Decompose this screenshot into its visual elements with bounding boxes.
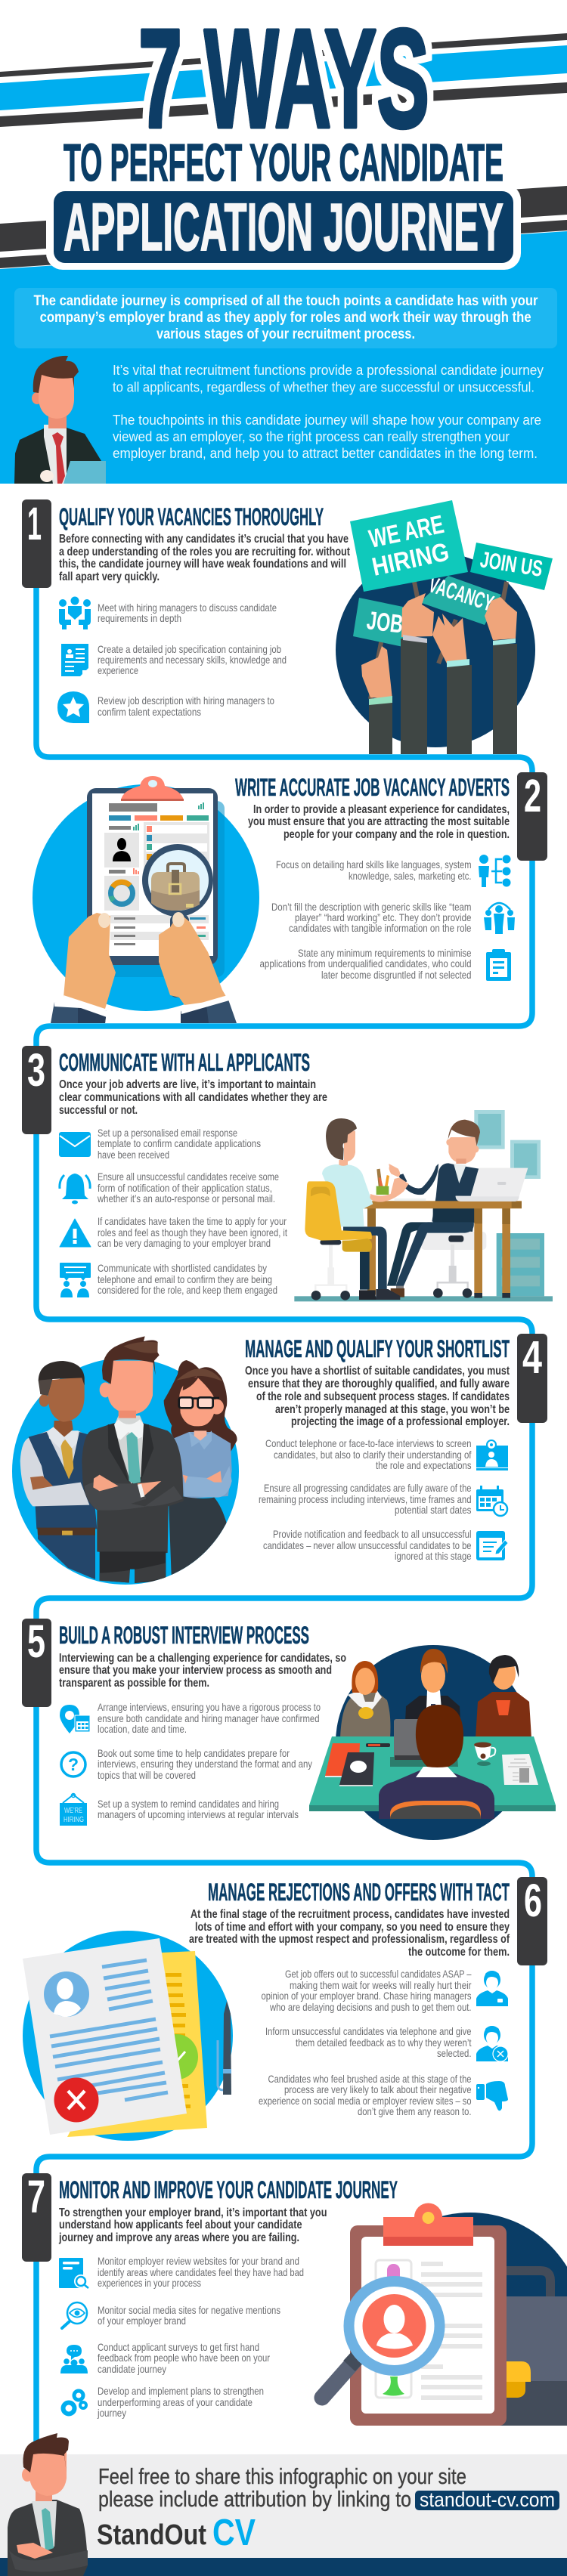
bullet: minimum requirements — [260, 947, 511, 981]
bullet: meet hiring managers: requirements in depth — [98, 612, 181, 624]
bullet: remaining process calendar: remaining process including interviews, time frames and — [259, 1493, 472, 1505]
bullet: shortlisted candidates chat: Communicate with shortlisted candidates by — [98, 1262, 267, 1274]
bullet: monitor social media: Monitor social media sites for negative mentions — [98, 2304, 280, 2316]
intro text 1: a deep understanding of the roles you are recruiting for. without — [59, 546, 351, 558]
bullet: help candidates prepare: topics that will be covered — [98, 1769, 196, 1781]
heading 1: QUALIFY YOUR VACANCIES THOROUGHLY — [59, 503, 324, 530]
bullet: improvement plans gears: underperforming areas of your candidate — [98, 2396, 253, 2408]
intro text 1: Before connecting with any candidates it’s crucial that you have — [59, 533, 349, 546]
bullet: inform unsuccessful candidates: them detailed feedback as to why they weren’t — [296, 2036, 472, 2049]
bullet: remaining process calendar — [259, 1482, 507, 1516]
bullet: generic skills — [271, 901, 515, 934]
illustration: interview panel at table — [309, 1645, 556, 1840]
bullet: improvement plans gears: Develop and implement plans to strengthen — [98, 2385, 264, 2397]
number badge 5 — [22, 1616, 51, 1707]
journey connector line — [36, 588, 532, 2457]
section 7 — [22, 2171, 567, 2439]
illustration: hiring signs held by hands: HIRING — [370, 537, 451, 582]
bullet: arrange interviews: ensure both candidate and hiring manager have confirmed — [98, 1712, 319, 1724]
intro text 7: journey and improve any areas where you are failing. — [58, 2231, 299, 2244]
intro text 2: people for your company and the role in question. — [284, 828, 510, 841]
intro text 2 — [248, 803, 510, 841]
bullet: meet hiring managers — [59, 597, 277, 629]
number badge 2 — [517, 770, 547, 861]
footer share text: Feel free to share this infographic on your site — [98, 2465, 466, 2489]
intro text 1 — [59, 533, 351, 583]
number badge 6: 6 — [524, 1875, 542, 1926]
intro text 4: ensure that they are thoroughly qualified, and fully aware — [248, 1378, 510, 1390]
header paragraphs: It’s vital that recruitment functions provide a professional candidate journey — [113, 362, 544, 378]
bullet: notification and feedback: candidates – never allow unsuccessful candidates to be — [263, 1539, 472, 1551]
illustration: office meeting at desk — [294, 1110, 553, 1301]
bullet: remaining process calendar: potential start dates — [395, 1504, 472, 1516]
bullet: applicant surveys: Conduct applicant surveys to get first hand — [98, 2341, 259, 2353]
header paragraphs: employer brand, and help you to attract better candidates in the long term. — [113, 445, 538, 461]
bullet: remaining process calendar: Ensure all progressing candidates are fully aware of the — [264, 1482, 472, 1494]
bullet: warning triangle: can be very damaging to your employer brand — [98, 1237, 271, 1249]
bullet: minimum requirements: later become disgruntled if not selected — [321, 969, 472, 981]
header paragraphs — [113, 362, 544, 461]
intro text 3: Once your job adverts are live, it’s important to maintain — [59, 1078, 316, 1091]
intro text 3 — [59, 1078, 327, 1117]
intro text 6 — [189, 1908, 510, 1959]
bullet: remind candidates sign — [60, 1794, 299, 1826]
bullet: improvement plans gears: journey — [97, 2407, 126, 2419]
number badge 7: 7 — [27, 2171, 45, 2222]
bullet: applicant surveys: feedback from people who have been on your — [98, 2352, 270, 2364]
intro text 1: this, the candidate journey will have weak foundations and will — [59, 558, 346, 571]
bullet: inform unsuccessful candidates — [265, 2025, 508, 2061]
bullet: job offers: making them wait for weeks will really hurt their — [290, 1979, 472, 1991]
illustration: hiring signs held by hands: WE ARE — [367, 510, 446, 554]
bullet: monitor social media — [62, 2302, 280, 2328]
bullet: telephone or face-to-face interviews: Conduct telephone or face-to-face interviews to screen — [265, 1437, 472, 1449]
bullet: hard skills — [276, 855, 511, 887]
bullet: remind candidates sign: HIRING — [64, 1816, 84, 1824]
bullet: notification and feedback: Provide notification and feedback to all unsuccessful — [273, 1528, 472, 1540]
number badge 3 — [22, 1044, 51, 1134]
bullet: email response: Set up a personalised email response — [98, 1127, 237, 1139]
number badge 2: 2 — [524, 770, 541, 821]
intro callout panel: various stages of your recruitment process. — [156, 326, 415, 342]
footer share text — [98, 2465, 466, 2512]
bullet: hard skills: knowledge, sales, marketing etc. — [349, 870, 472, 882]
bullet: job specification: experience — [98, 664, 138, 676]
bullet: arrange interviews: location, date and time. — [98, 1723, 187, 1735]
intro text 5: transparent as possible for them. — [59, 1677, 209, 1690]
bullet: notification bell: Ensure all unsuccessful candidates receive some — [98, 1170, 279, 1183]
bullet: job specification: Create a detailed job specification containing job — [98, 643, 281, 655]
footer link badge: standout-cv.com — [420, 2488, 555, 2511]
bullet: thumbs down: process are very likely to talk about their negative — [284, 2083, 472, 2095]
bullet: hard skills: Focus on detailing hard skills like languages, system — [276, 858, 472, 871]
intro text 5 — [59, 1652, 346, 1690]
illustration: CV documents with approve and reject marks — [23, 1931, 233, 2141]
bullet: help candidates prepare: ? — [68, 1755, 79, 1774]
section 3 — [22, 1044, 553, 1301]
intro text 6: the outcome for them. — [408, 1946, 510, 1959]
section 2 — [33, 770, 547, 1023]
bullet: review job description: Review job description with hiring managers to — [98, 694, 274, 707]
section 6 — [23, 1875, 547, 2141]
bullet: review job description: confirm talent expectations — [98, 706, 201, 718]
intro text 1: fall apart very quickly. — [59, 571, 160, 583]
bullet: notification bell — [60, 1170, 279, 1205]
bullet: telephone or face-to-face interviews: candidates, but also to clarify their understanding of — [274, 1449, 472, 1461]
bullet: arrange interviews: Arrange interviews, ensuring you have a rigorous process to — [98, 1701, 321, 1713]
bullet: meet hiring managers: Meet with hiring managers to discuss candidate — [98, 601, 277, 614]
number badge 4: 4 — [522, 1331, 542, 1383]
bullet: monitor review websites: experiences in your process — [98, 2277, 201, 2289]
bullet: monitor review websites — [59, 2255, 304, 2289]
number badge 6 — [517, 1875, 547, 1965]
bullet: applicant surveys — [60, 2341, 270, 2375]
bullet: remind candidates sign: Set up a system to remind candidates and hiring — [98, 1798, 279, 1810]
number badge 3: 3 — [27, 1044, 45, 1096]
intro text 4 — [245, 1365, 510, 1428]
intro text 7: To strengthen your employer brand, it’s important that you — [59, 2206, 327, 2219]
bullet: notification and feedback: ignored at this stage — [395, 1550, 472, 1562]
bullet: help candidates prepare: interviews, ensuring they understand the format and any — [98, 1758, 312, 1770]
bullet: shortlisted candidates chat — [60, 1262, 277, 1297]
bullet: job offers: who are delaying decisions and push to get them out. — [269, 2001, 472, 2013]
footer share text: please include attribution by linking to — [98, 2488, 411, 2512]
header paragraphs: viewed as an employer, so the right process can really strengthen your — [113, 428, 510, 444]
bullet: minimum requirements: State any minimum requirements to minimise — [298, 947, 472, 959]
bullet: email response: template to confirm candidate applications — [98, 1137, 261, 1149]
bullet: job offers: opinion of your employer brand. Chase hiring managers — [262, 1990, 472, 2002]
StandOut CV logo — [97, 2513, 256, 2553]
illustration: clipboard, magnifier and hands — [33, 776, 259, 1023]
section 4 — [12, 1331, 547, 1585]
intro text 4: projecting the image of a professional employer. — [291, 1415, 510, 1428]
bullet: remind candidates sign: WE’RE — [64, 1807, 82, 1815]
header paragraphs: to all applicants, regardless of whether they are successful or unsuccessful. — [113, 379, 534, 394]
bullet: job specification: requirements and necessary skills, knowledge and — [98, 654, 287, 666]
bullet: email response: have been received — [98, 1149, 169, 1161]
bullet: job offers — [262, 1968, 508, 2013]
illustration: footer businessman — [8, 2433, 88, 2576]
bullet: monitor social media: of your employer brand — [98, 2315, 186, 2327]
header blue background — [0, 231, 567, 484]
bullet: thumbs down: Candidates who feel brushed aside at this stage of the — [268, 2073, 472, 2085]
bullet: monitor review websites: Monitor employer review websites for your brand and — [98, 2255, 299, 2267]
bullet: improvement plans gears — [64, 2385, 264, 2419]
bullet: help candidates prepare — [61, 1747, 312, 1781]
intro text 5: Interviewing can be a challenging experience for candidates, so — [59, 1652, 346, 1665]
number badge 4 — [517, 1331, 547, 1423]
bullet: review job description — [57, 691, 274, 723]
number badge 5: 5 — [27, 1616, 45, 1667]
illustration: clipboard, magnifier and briefcase — [322, 2203, 567, 2439]
section 5 — [22, 1616, 556, 1840]
bullet: job offers: Get job offers out to successful candidates ASAP – — [285, 1968, 472, 1980]
number badge 7 — [22, 2171, 51, 2262]
illustration: hiring signs held by hands: VACANCY — [426, 572, 497, 617]
bullet: generic skills: player” “hard working” etc. They don’t provide — [295, 911, 472, 923]
bullet: help candidates prepare: Book out some time to help candidates prepare for — [98, 1747, 290, 1759]
intro text 7: understand how applicants feel about your candidate — [59, 2219, 302, 2231]
intro text 5: ensure that you make your interview process as smooth and — [59, 1664, 332, 1677]
bullet: minimum requirements: applications from underqualified candidates, who could — [260, 957, 472, 969]
intro callout panel — [14, 288, 557, 348]
heading 5: BUILD A ROBUST INTERVIEW PROCESS — [59, 1622, 309, 1649]
bullet: shortlisted candidates chat: considered for the role, and keep them engaged — [98, 1284, 277, 1296]
bullet: notification bell: whether it’s an auto-response or personal mail. — [97, 1192, 275, 1205]
bullet: notification and feedback — [263, 1528, 508, 1562]
bullet: telephone or face-to-face interviews — [265, 1437, 508, 1471]
bullet: monitor review websites: identify areas where candidates feel they have had bad — [98, 2266, 304, 2278]
StandOut CV logo: CV — [212, 2513, 256, 2553]
footer band — [0, 2454, 567, 2576]
illustration: hiring signs held by hands: JOB — [365, 606, 404, 639]
intro text 7 — [58, 2206, 327, 2244]
bullet: thumbs down: experience on social media or employer review sites – so — [259, 2095, 472, 2107]
intro text 3: successful or not. — [59, 1104, 138, 1117]
bullet: warning triangle — [60, 1215, 287, 1249]
bullet: warning triangle: If candidates have taken the time to apply for your — [98, 1215, 287, 1227]
bullet: inform unsuccessful candidates: selected. — [437, 2047, 472, 2059]
intro text 3: clear communications with all candidates whether they are — [59, 1091, 327, 1104]
heading 3: COMMUNICATE WITH ALL APPLICANTS — [59, 1049, 310, 1076]
illustration: hiring signs held by hands — [336, 500, 553, 754]
bullet: inform unsuccessful candidates: Inform unsuccessful candidates via telephone and give — [265, 2025, 472, 2037]
bullet: generic skills: Don’t fill the description with generic skills like “team — [271, 901, 472, 913]
bullet: generic skills: candidates with tangible information on the role — [289, 922, 472, 934]
header paragraphs: The touchpoints in this candidate journey will shape how your company are — [113, 412, 541, 428]
bullet: thumbs down: don’t give them any reason to. — [358, 2105, 472, 2117]
bullet: job specification — [61, 643, 287, 676]
header stripes — [0, 33, 567, 268]
bullet: remind candidates sign: managers of upcoming interviews at regular intervals — [98, 1808, 299, 1820]
bullet: notification bell: form of notification of their application status, — [98, 1182, 272, 1194]
number badge 1 — [22, 498, 51, 588]
bullet: warning triangle: roles and feel as though they have been ignored, it — [98, 1226, 287, 1239]
intro text 4: aren’t properly managed at this stage, you won’t be — [275, 1403, 510, 1416]
bullet: shortlisted candidates chat: telephone and email to confirm they are being — [98, 1273, 272, 1285]
StandOut CV logo: StandOut — [97, 2519, 206, 2551]
number badge 1: 1 — [27, 498, 42, 549]
section 1 — [22, 498, 553, 754]
bullet: telephone or face-to-face interviews: the role and expectations — [376, 1459, 472, 1471]
bullet: arrange interviews — [60, 1701, 321, 1735]
illustration: shortlisted team of three — [12, 1336, 239, 1585]
bullet: applicant surveys: candidate journey — [98, 2363, 166, 2375]
illustration: header businessman — [14, 356, 106, 484]
bullet: email response — [59, 1127, 261, 1161]
bullet: thumbs down — [259, 2073, 508, 2117]
